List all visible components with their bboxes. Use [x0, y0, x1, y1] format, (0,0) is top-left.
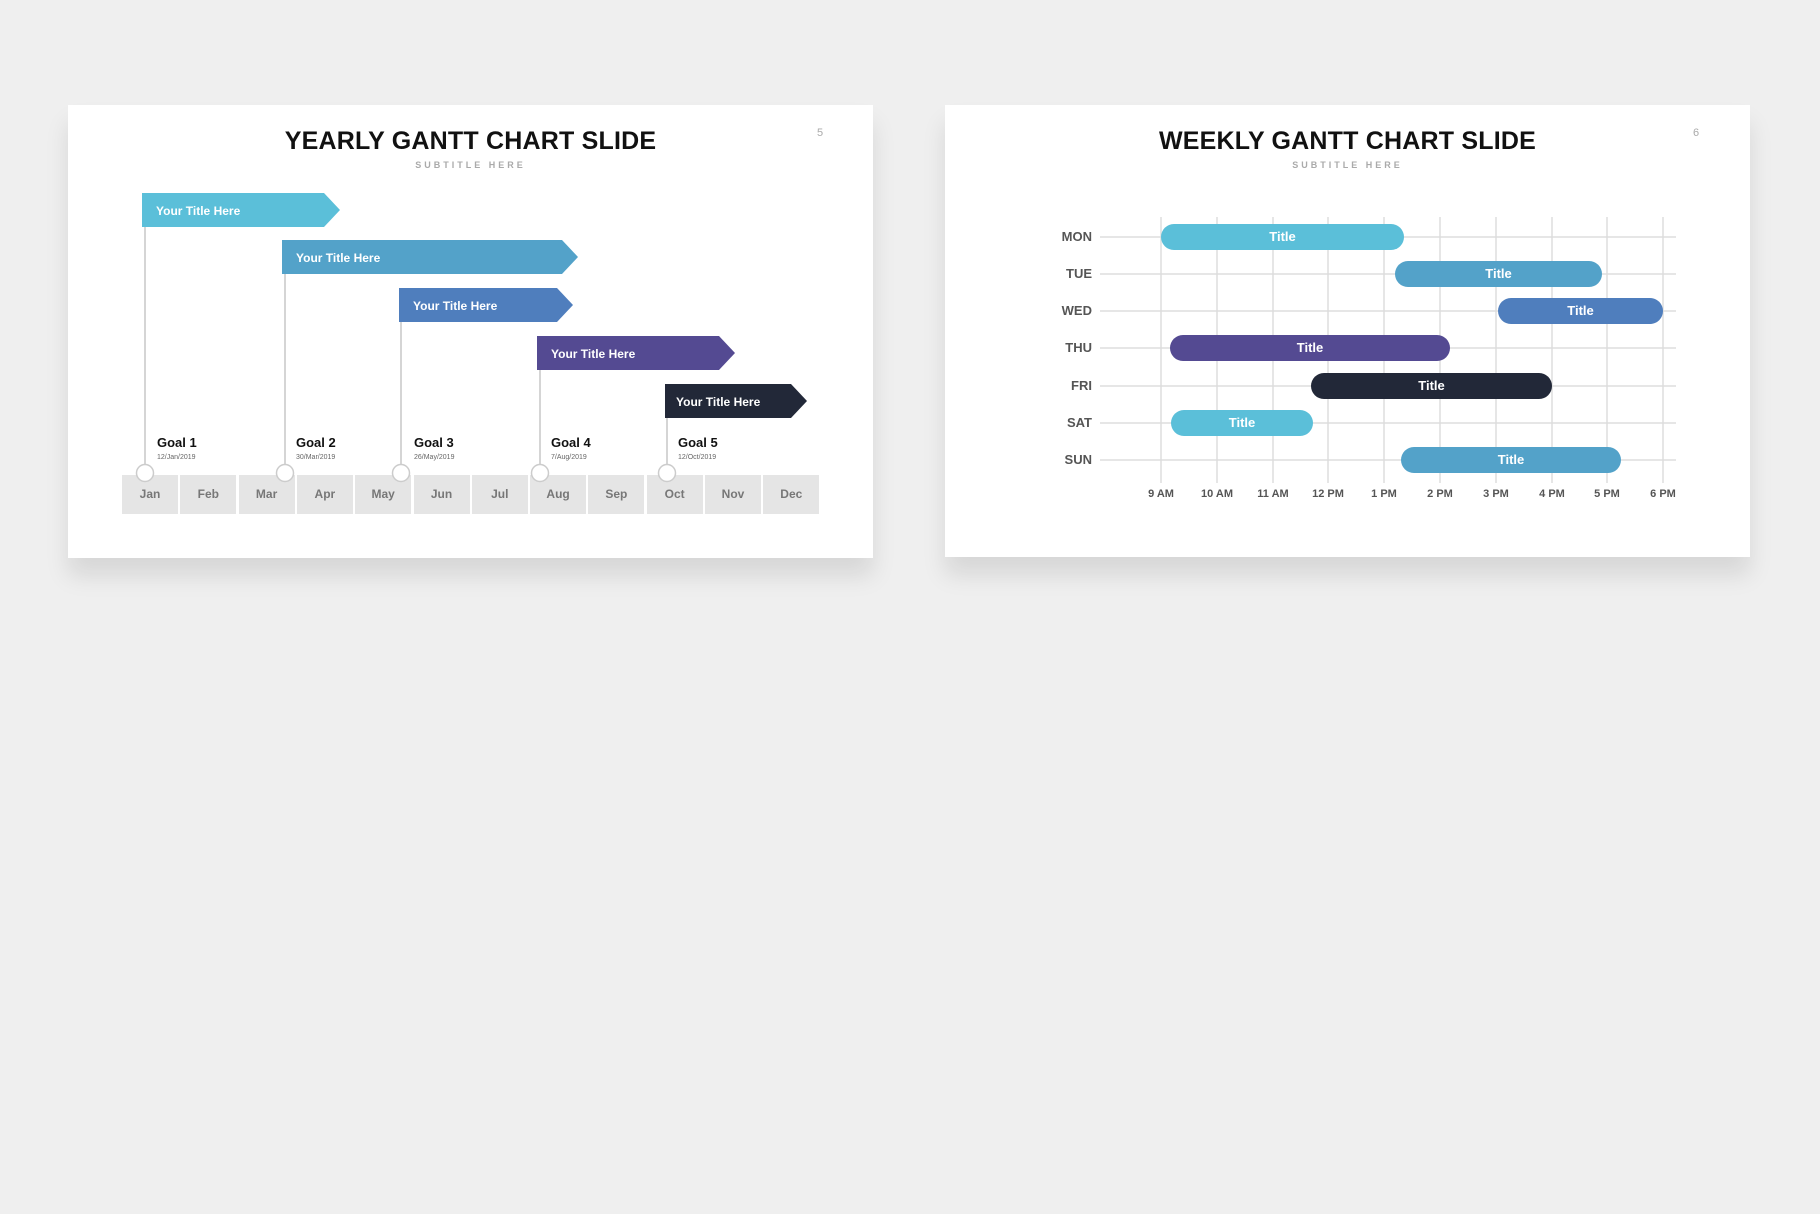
- bar 2: Your Title Here: [296, 251, 381, 265]
- goal labels: [157, 435, 718, 461]
- time labels: 6 PM: [1650, 488, 1676, 500]
- grid: [1100, 217, 1676, 483]
- month axis: Apr: [315, 487, 335, 501]
- time labels: 4 PM: [1539, 488, 1565, 500]
- time labels: 1 PM: [1371, 488, 1397, 500]
- bars: Title: [1498, 452, 1524, 467]
- time labels: 5 PM: [1594, 488, 1620, 500]
- month axis: Sep: [605, 487, 627, 501]
- bar 4: Your Title Here: [551, 347, 636, 361]
- goal labels: 7/Aug/2019: [551, 454, 587, 461]
- goal labels: Goal 2: [296, 435, 336, 450]
- bar 3: [399, 288, 573, 322]
- month axis: Feb: [198, 487, 219, 501]
- bar 3: Your Title Here: [413, 299, 498, 313]
- page number: 5: [817, 127, 823, 139]
- bar 1: [142, 193, 340, 227]
- day labels: SAT: [1067, 415, 1092, 430]
- milestone circles: [136, 464, 676, 482]
- month axis: May: [372, 487, 395, 501]
- month axis: Jul: [491, 487, 508, 501]
- bar 1: Your Title Here: [156, 204, 241, 218]
- day labels: THU: [1065, 340, 1092, 355]
- bars: Title: [1418, 378, 1445, 393]
- day labels: WED: [1062, 303, 1092, 318]
- bars: Title: [1567, 303, 1594, 318]
- title: YEARLY GANTT CHART SLIDE: [285, 127, 656, 155]
- day labels: MON: [1062, 229, 1092, 244]
- chart: yearly gantt: [142, 193, 807, 464]
- panel: weekly gantt slide: [945, 105, 1750, 557]
- bar 5: Your Title Here: [676, 395, 761, 409]
- month axis: Dec: [780, 487, 802, 501]
- month axis: Aug: [546, 487, 570, 501]
- page number: 6: [1693, 127, 1699, 139]
- goal labels: 26/May/2019: [414, 454, 454, 461]
- day labels: [1062, 229, 1092, 467]
- month axis: Jan: [140, 487, 160, 501]
- time labels: 10 AM: [1201, 488, 1233, 500]
- time labels: [1148, 488, 1676, 500]
- goal labels: Goal 1: [157, 435, 197, 450]
- bars: Title: [1269, 229, 1296, 244]
- day labels: SUN: [1065, 452, 1092, 467]
- subtitle: SUBTITLE HERE: [415, 160, 526, 170]
- goal labels: 12/Jan/2019: [157, 454, 196, 461]
- time labels: 3 PM: [1483, 488, 1509, 500]
- bars: Title: [1485, 266, 1512, 281]
- time labels: 12 PM: [1312, 488, 1344, 500]
- bars: [1161, 224, 1663, 473]
- month axis: Jun: [431, 487, 452, 501]
- month axis: Oct: [665, 487, 685, 501]
- goal labels: 30/Mar/2019: [296, 454, 335, 461]
- bars: Title: [1229, 415, 1255, 430]
- goal labels: Goal 4: [551, 435, 591, 450]
- goal labels: 12/Oct/2019: [678, 454, 716, 461]
- panel: yearly gantt slide: [68, 105, 873, 558]
- connector lines: [145, 227, 667, 473]
- goal labels: Goal 3: [414, 435, 454, 450]
- time labels: 9 AM: [1148, 488, 1174, 500]
- day labels: FRI: [1071, 378, 1092, 393]
- bar 2: [282, 240, 578, 274]
- bar 4: [537, 336, 735, 370]
- month axis: [122, 475, 819, 514]
- title: WEEKLY GANTT CHART SLIDE: [1159, 127, 1536, 155]
- bar 5: [665, 384, 807, 418]
- bars: Title: [1297, 340, 1323, 355]
- day labels: TUE: [1066, 266, 1092, 281]
- month axis: Mar: [256, 487, 277, 501]
- time labels: 2 PM: [1427, 488, 1453, 500]
- goal labels: Goal 5: [678, 435, 718, 450]
- time labels: 11 AM: [1257, 488, 1289, 500]
- subtitle: SUBTITLE HERE: [1292, 160, 1403, 170]
- month axis: Nov: [722, 487, 744, 501]
